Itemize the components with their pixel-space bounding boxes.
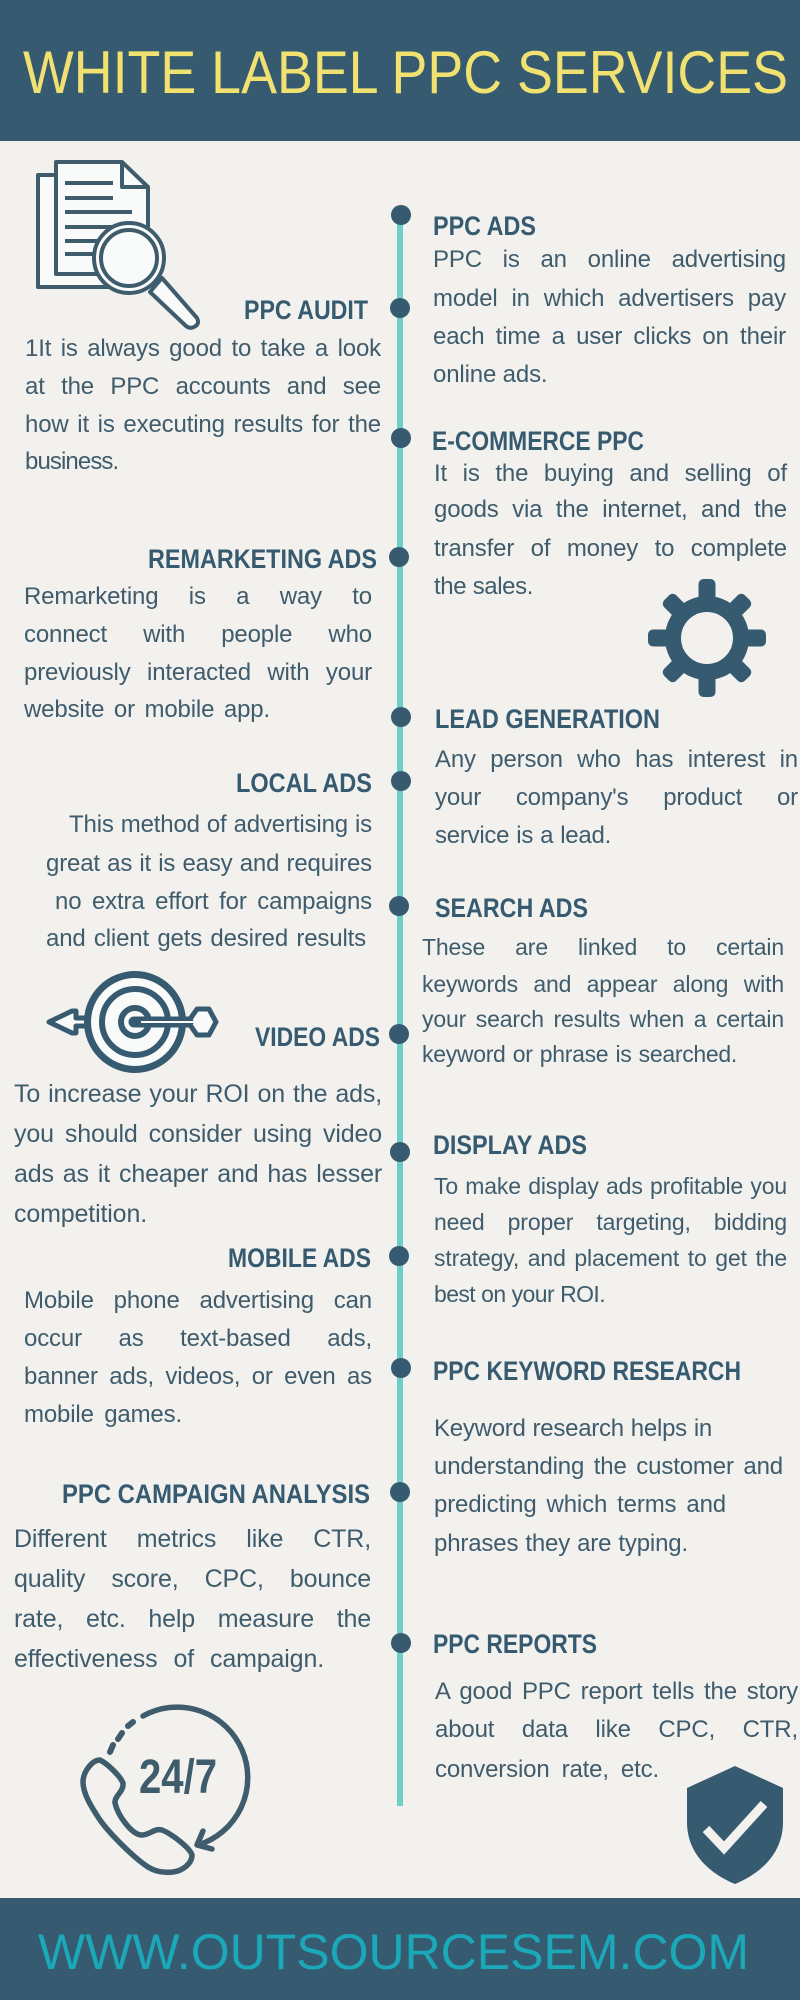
section: PPC ads: online ads. bbox=[433, 361, 547, 388]
heading: search ads: SEARCH ADS bbox=[435, 893, 588, 923]
section: PPC reports bbox=[433, 1629, 798, 1783]
section: PPC reports: A good PPC report tells the story bbox=[435, 1678, 798, 1705]
section: local ads bbox=[46, 768, 372, 952]
section: search ads: your search results when a certain bbox=[422, 1006, 784, 1032]
footer banner bbox=[0, 1898, 800, 2000]
section: remarketing ads bbox=[24, 544, 377, 723]
section: mobile ads: mobile games. bbox=[24, 1401, 182, 1428]
section: remarketing ads: Remarketing is a way to bbox=[24, 583, 372, 610]
section: video ads: competition. bbox=[14, 1200, 147, 1228]
section: remarketing ads: previously interacted with your bbox=[24, 659, 372, 686]
section: PPC ads: PPC is an online advertising bbox=[433, 246, 786, 273]
section: remarketing ads: website or mobile app. bbox=[24, 696, 270, 723]
section: mobile ads: Mobile phone advertising can bbox=[24, 1287, 372, 1314]
icon: gear bbox=[648, 579, 766, 697]
section: lead generation: Any person who has interest in bbox=[435, 746, 798, 773]
section: PPC audit: 1It is always good to take a look bbox=[25, 335, 381, 362]
section: PPC keyword research: Keyword research helps in bbox=[434, 1415, 712, 1442]
icon: 24/7 phone bbox=[80, 1704, 250, 1876]
section: search ads: keyword or phrase is searched. bbox=[422, 1041, 737, 1067]
section: video ads: you should consider using video bbox=[14, 1120, 382, 1148]
section: mobile ads: occur as text-based ads, bbox=[24, 1325, 372, 1352]
section: PPC campaign analysis bbox=[14, 1479, 371, 1673]
section: e-commerce PPC bbox=[432, 426, 788, 600]
section: mobile ads bbox=[24, 1243, 372, 1428]
section: PPC campaign analysis: Different metrics like CTR, bbox=[14, 1525, 371, 1553]
section: PPC audit: at the PPC accounts and see bbox=[25, 373, 381, 400]
section: local ads: and client gets desired results bbox=[46, 925, 366, 952]
timeline with dots bbox=[389, 205, 411, 1806]
section: PPC keyword research: phrases they are typing. bbox=[434, 1530, 688, 1557]
section: lead generation: your company's product or bbox=[435, 784, 798, 811]
section: mobile ads: banner ads, videos, or even as bbox=[24, 1363, 372, 1390]
icon: shield with check bbox=[687, 1766, 783, 1884]
footer URL: WWW.OUTSOURCESEM.COM bbox=[38, 1924, 749, 1980]
heading: e-commerce PPC: E-COMMERCE PPC bbox=[432, 426, 644, 456]
section: e-commerce PPC: goods via the internet, and the bbox=[434, 496, 787, 523]
section: lead generation bbox=[435, 704, 798, 849]
section: search ads bbox=[422, 893, 784, 1067]
section: PPC ads bbox=[433, 211, 786, 388]
icon: target with arrow bbox=[46, 971, 218, 1073]
section: display ads bbox=[433, 1130, 787, 1307]
icon: document with magnifier bbox=[36, 160, 200, 330]
section: search ads: These are linked to certain bbox=[422, 934, 784, 960]
section: local ads: great as it is easy and requires bbox=[46, 850, 372, 877]
section: e-commerce PPC: transfer of money to complete bbox=[434, 535, 787, 562]
section: PPC keyword research bbox=[433, 1356, 783, 1557]
section: PPC ads: model in which advertisers pay bbox=[433, 285, 786, 312]
section: video ads bbox=[14, 1022, 382, 1228]
section: PPC campaign analysis: rate, etc. help measure the bbox=[14, 1605, 371, 1633]
section: PPC reports: conversion rate, etc. bbox=[435, 1756, 659, 1783]
section: video ads: To increase your ROI on the ads, bbox=[14, 1080, 382, 1108]
header banner bbox=[0, 0, 800, 141]
section: display ads: strategy, and placement to get the bbox=[434, 1245, 787, 1271]
section: display ads: To make display ads profitable you bbox=[434, 1173, 787, 1199]
section: PPC keyword research: understanding the customer and bbox=[434, 1453, 783, 1480]
heading: local ads: LOCAL ADS bbox=[236, 768, 372, 798]
section: PPC reports: about data like CPC, CTR, bbox=[435, 1716, 798, 1743]
heading: PPC audit: PPC AUDIT bbox=[244, 295, 368, 325]
section: display ads: best on your ROI. bbox=[434, 1281, 605, 1307]
heading: PPC keyword research: PPC KEYWORD RESEARCH bbox=[433, 1356, 741, 1386]
section: local ads: no extra effort for campaigns bbox=[55, 888, 372, 915]
section: search ads: keywords and appear along with bbox=[422, 971, 784, 997]
section: PPC ads: each time a user clicks on their bbox=[433, 323, 786, 350]
heading: PPC reports: PPC REPORTS bbox=[433, 1629, 597, 1659]
heading: mobile ads: MOBILE ADS bbox=[228, 1243, 371, 1273]
section: display ads: need proper targeting, bidding bbox=[434, 1209, 787, 1235]
section: PPC campaign analysis: quality score, CPC, bounce bbox=[14, 1565, 371, 1593]
section: PPC audit: how it is executing results for the bbox=[25, 411, 381, 438]
section: video ads: ads as it cheaper and has lesser bbox=[14, 1160, 382, 1188]
section: PPC audit: business. bbox=[25, 448, 118, 475]
heading: display ads: DISPLAY ADS bbox=[433, 1130, 587, 1160]
section: PPC keyword research: predicting which terms and bbox=[434, 1491, 726, 1518]
heading: remarketing ads: REMARKETING ADS bbox=[148, 544, 377, 574]
heading: PPC campaign analysis: PPC CAMPAIGN ANALYSIS bbox=[62, 1479, 370, 1509]
section: PPC audit bbox=[25, 295, 382, 475]
section: local ads: This method of advertising is bbox=[69, 811, 372, 838]
heading: lead generation: LEAD GENERATION bbox=[435, 704, 660, 734]
section: e-commerce PPC: It is the buying and selling of bbox=[434, 460, 787, 487]
section: PPC campaign analysis: effectiveness of campaign. bbox=[14, 1645, 324, 1673]
heading: video ads: VIDEO ADS bbox=[255, 1022, 380, 1052]
section: e-commerce PPC: the sales. bbox=[434, 573, 533, 600]
section: lead generation: service is a lead. bbox=[435, 822, 611, 849]
heading: PPC ads: PPC ADS bbox=[433, 211, 536, 241]
icon: 24/7 phone: 24/7 bbox=[139, 1751, 217, 1804]
section: remarketing ads: connect with people who bbox=[24, 621, 372, 648]
